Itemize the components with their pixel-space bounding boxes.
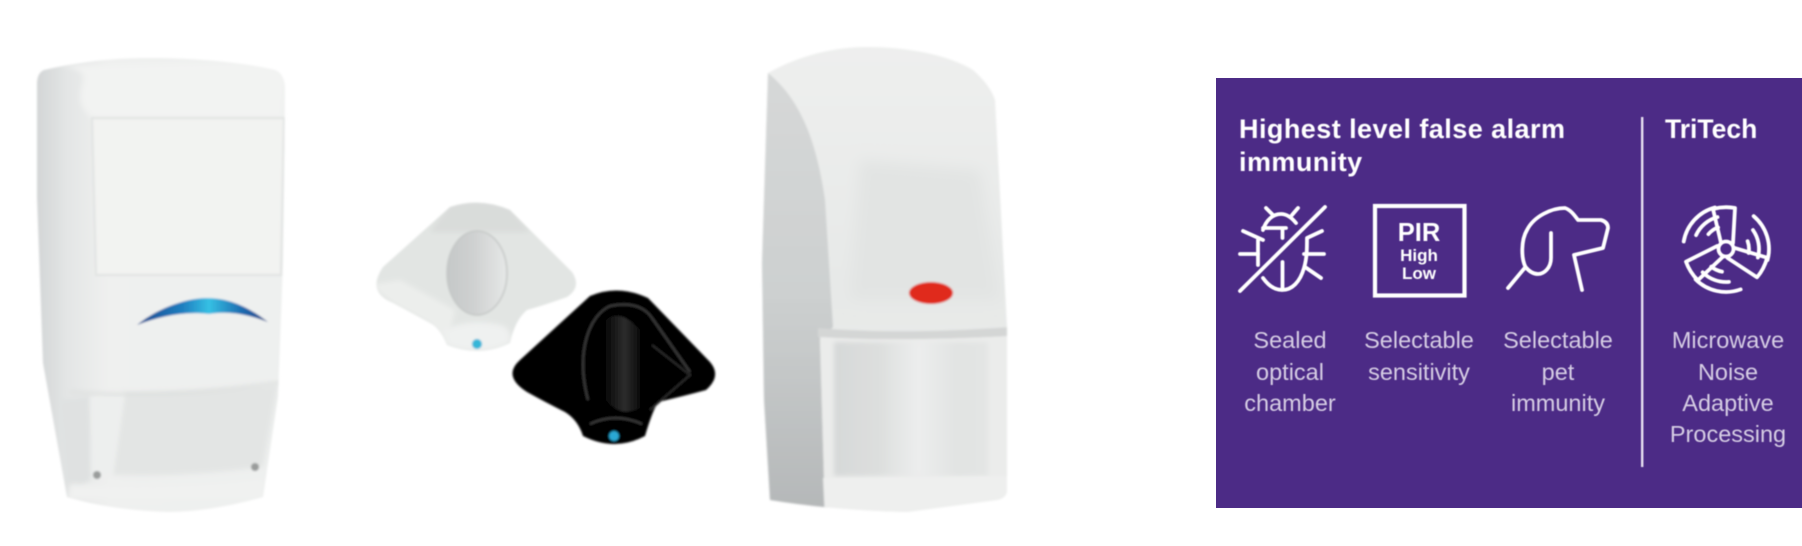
label: sealed optical chamber: chamber xyxy=(1244,390,1336,416)
side shading xyxy=(762,74,834,508)
icon: PIR high low box: Low xyxy=(1402,264,1437,283)
lens band xyxy=(818,327,1010,339)
label: microwave noise adaptive processing: Microwave xyxy=(1672,327,1784,353)
icon: fan with microwave arcs xyxy=(1684,207,1783,307)
icon: crossed-out bug xyxy=(1240,207,1325,291)
heading: false alarm immunity xyxy=(1239,114,1565,177)
blue status arc xyxy=(137,298,268,325)
lens xyxy=(820,336,822,340)
label: sealed optical chamber xyxy=(1244,327,1336,416)
heading: false alarm immunity: Highest level false alarm xyxy=(1239,114,1565,144)
product: black ceiling detector xyxy=(512,290,715,444)
icon: PIR high low box: PIR xyxy=(1398,219,1440,247)
icon: PIR high low box: High xyxy=(1400,246,1438,265)
label: selectable pet immunity: pet xyxy=(1542,359,1575,385)
label: microwave noise adaptive processing xyxy=(1670,327,1786,447)
product: white ceiling detector xyxy=(376,202,576,352)
screws xyxy=(93,471,101,479)
label: selectable pet immunity xyxy=(1503,327,1613,416)
window panel xyxy=(92,118,284,275)
icon: dog head xyxy=(1508,208,1608,290)
label: selectable pet immunity: immunity xyxy=(1511,390,1605,416)
divider line xyxy=(1641,117,1643,467)
panel: feature panel xyxy=(1216,78,1802,508)
label: selectable pet immunity: Selectable xyxy=(1503,327,1613,353)
heading: TriTech: TriTech xyxy=(1665,114,1757,144)
product: left wall-mounted detector xyxy=(30,50,290,520)
label: microwave noise adaptive processing: Noise xyxy=(1698,359,1758,385)
red LED xyxy=(909,282,953,304)
label: selectable sensitivity xyxy=(1364,327,1474,385)
label: sealed optical chamber: Sealed xyxy=(1253,327,1327,353)
blue LED xyxy=(472,339,482,349)
icon: PIR high low box xyxy=(1375,206,1464,296)
label: selectable sensitivity: Selectable xyxy=(1364,327,1474,353)
bottom band xyxy=(822,478,830,508)
blue LED xyxy=(609,431,619,441)
label: sealed optical chamber: optical xyxy=(1256,359,1324,385)
label: selectable sensitivity: sensitivity xyxy=(1368,359,1470,385)
highlights xyxy=(583,304,690,400)
label: microwave noise adaptive processing: Adaptive xyxy=(1682,390,1774,416)
heading: false alarm immunity: immunity xyxy=(1239,147,1363,177)
lower lens xyxy=(112,385,278,476)
product: right tall detector xyxy=(750,40,1015,520)
label: microwave noise adaptive processing: Processing xyxy=(1670,421,1786,447)
sensor oval xyxy=(447,231,507,315)
